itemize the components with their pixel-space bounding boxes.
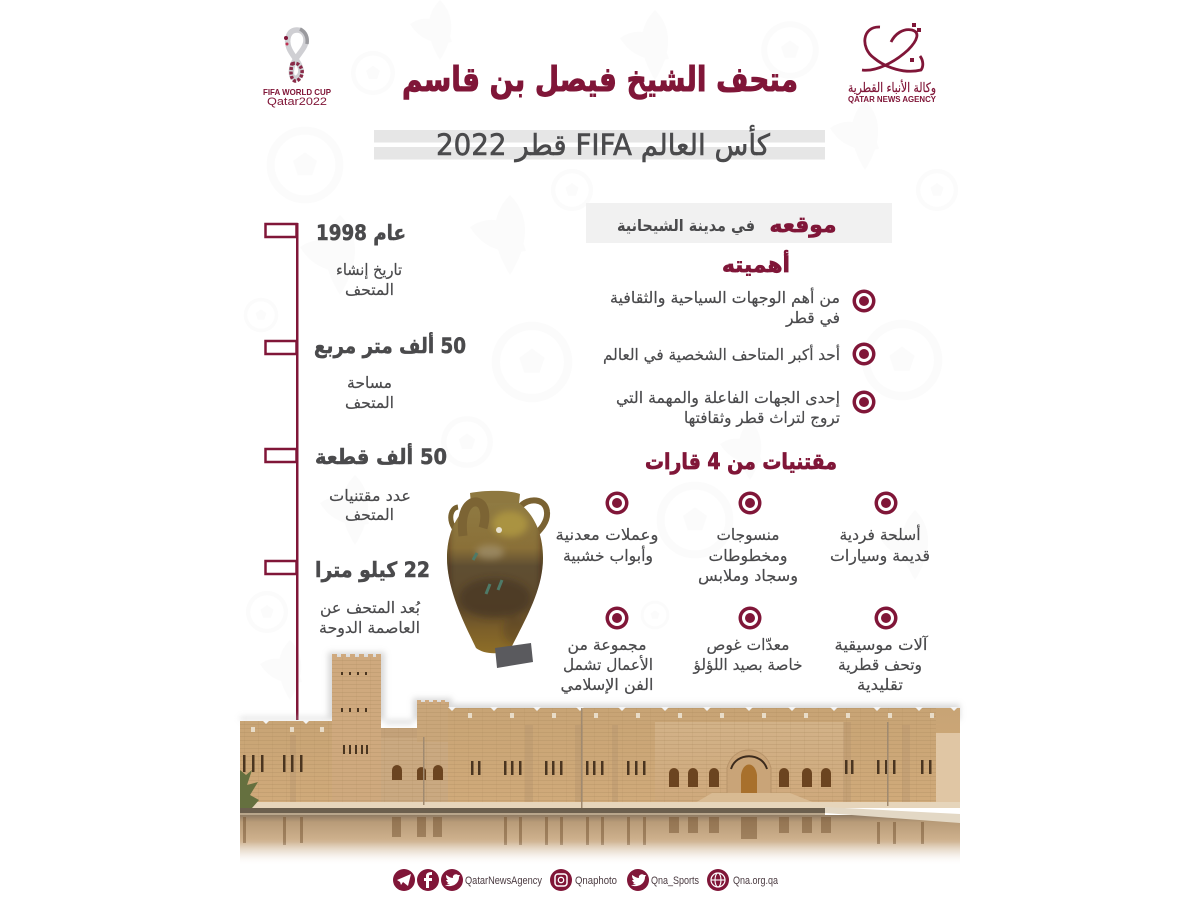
timeline line (296, 223, 298, 720)
bullet 2 (603, 342, 876, 366)
item: musical instruments (834, 606, 928, 694)
roofline shadow (240, 652, 960, 724)
milestone: area (266, 331, 466, 412)
palm (240, 770, 259, 808)
item: pearl diving (693, 606, 802, 674)
timeline (266, 221, 466, 720)
logo: FIFA World Cup Qatar 2022: FIFA WORLD CUP (263, 87, 331, 97)
milestone: area: المتحف (345, 394, 394, 412)
icon: telegram (393, 869, 415, 891)
panel: location (586, 203, 892, 243)
logo: Qatar News Agency (848, 23, 937, 104)
heading: collections: مقتنيات من 4 قارات (645, 450, 837, 475)
logo: FIFA World Cup Qatar 2022 (263, 29, 331, 108)
milestone: area: مساحة (347, 374, 392, 392)
building facade (240, 654, 960, 808)
milestone: distance: العاصمة الدوحة (319, 619, 420, 638)
logo: Qatar News Agency: QATAR NEWS AGENCY (848, 95, 937, 104)
embankment (240, 808, 825, 813)
footer: social links (393, 869, 779, 891)
handle: QatarNewsAgency: QatarNewsAgency (465, 875, 542, 887)
item: textiles (698, 492, 798, 586)
panel: location: في مدينة الشيحانية (617, 216, 755, 236)
handle: website: Qna.org.qa (733, 875, 779, 887)
bullet 1 (610, 287, 876, 328)
item: musical instruments: وتحف قطرية (838, 656, 922, 675)
museum label card (495, 643, 533, 668)
item: musical instruments: تقليدية (857, 676, 903, 694)
logo: FIFA World Cup Qatar 2022: Qatar2022 (267, 96, 327, 108)
panel: importance (603, 249, 876, 428)
subtitle with striped band (374, 124, 825, 163)
icon: facebook (417, 869, 439, 891)
bullet 1: من أهم الوجهات السياحية والثقافية (610, 287, 840, 308)
bullet 3: تروج لتراث قطر وثقافتها (684, 409, 840, 428)
handle: Qna_Sports: Qna_Sports (651, 875, 699, 887)
icon: instagram (550, 869, 572, 891)
milestone: 1998: عام 1998 (316, 221, 406, 245)
item: textiles: ومخطوطات (708, 547, 788, 566)
bullet 1: في قطر (785, 309, 840, 328)
handle: Qnaphoto: Qnaphoto (575, 875, 617, 887)
item: islamic art: الفن الإسلامي (560, 676, 654, 695)
item: islamic art (560, 606, 654, 695)
subtitle with striped band: كأس العالم FIFA قطر 2022 (436, 124, 770, 163)
item: weapons and cars: قديمة وسيارات (830, 547, 930, 566)
milestone: pieces: عدد مقتنيات (329, 487, 411, 505)
milestone: distance: 22 كيلو مترا (315, 558, 430, 582)
icon: globe (707, 869, 729, 891)
logo: Qatar News Agency: وكالة الأنباء القطرية (848, 79, 936, 96)
milestone: area: 50 ألف متر مربع (314, 331, 466, 358)
item: pearl diving: خاصة بصيد اللؤلؤ (693, 656, 802, 674)
bullet 2: أحد أكبر المتاحف الشخصية في العالم (603, 344, 840, 365)
milestone: 1998: المتحف (345, 281, 394, 299)
illustration: museum building (240, 652, 960, 866)
title: متحف الشيخ فيصل بن قاسم (402, 60, 798, 100)
milestone: 1998: تاريخ إنشاء (336, 261, 402, 280)
icon: twitter sports (627, 869, 649, 891)
milestone: 1998 (266, 221, 406, 299)
item: weapons and cars: أسلحة فردية (840, 524, 920, 544)
milestone: pieces (266, 442, 447, 524)
item: musical instruments: آلات موسيقية (834, 635, 928, 654)
background panel with faint pattern (240, 0, 960, 900)
item: textiles: وسجاد وملابس (698, 567, 798, 586)
reflection (243, 817, 924, 845)
milestone: distance: بُعد المتحف عن (320, 599, 421, 617)
light poles (423, 708, 888, 808)
milestone: distance (266, 558, 430, 638)
bullet 3: إحدى الجهات الفاعلة والمهمة التي (616, 389, 840, 408)
crenellation notches (262, 707, 958, 724)
item: islamic art: الأعمال تشمل (563, 655, 653, 674)
milestone: pieces: المتحف (345, 506, 394, 524)
panel: collections (556, 450, 930, 695)
icon: twitter (441, 869, 463, 891)
item: textiles: منسوجات (716, 526, 780, 544)
item: coins and doors: وأبواب خشبية (563, 545, 653, 566)
illustration: antique jar (440, 491, 550, 668)
item: weapons and cars (830, 492, 930, 566)
item: coins and doors: وعملات معدنية (556, 526, 658, 545)
milestone: pieces: 50 ألف قطعة (315, 442, 447, 469)
item: islamic art: مجموعة من (568, 636, 646, 654)
bullet 3 (616, 389, 876, 428)
panel: location: موقعه (770, 213, 836, 238)
water (240, 815, 960, 865)
item: pearl diving: معدّات غوص (706, 636, 790, 654)
item: coins and doors (556, 492, 658, 566)
heading: importance: أهميته (722, 249, 790, 278)
